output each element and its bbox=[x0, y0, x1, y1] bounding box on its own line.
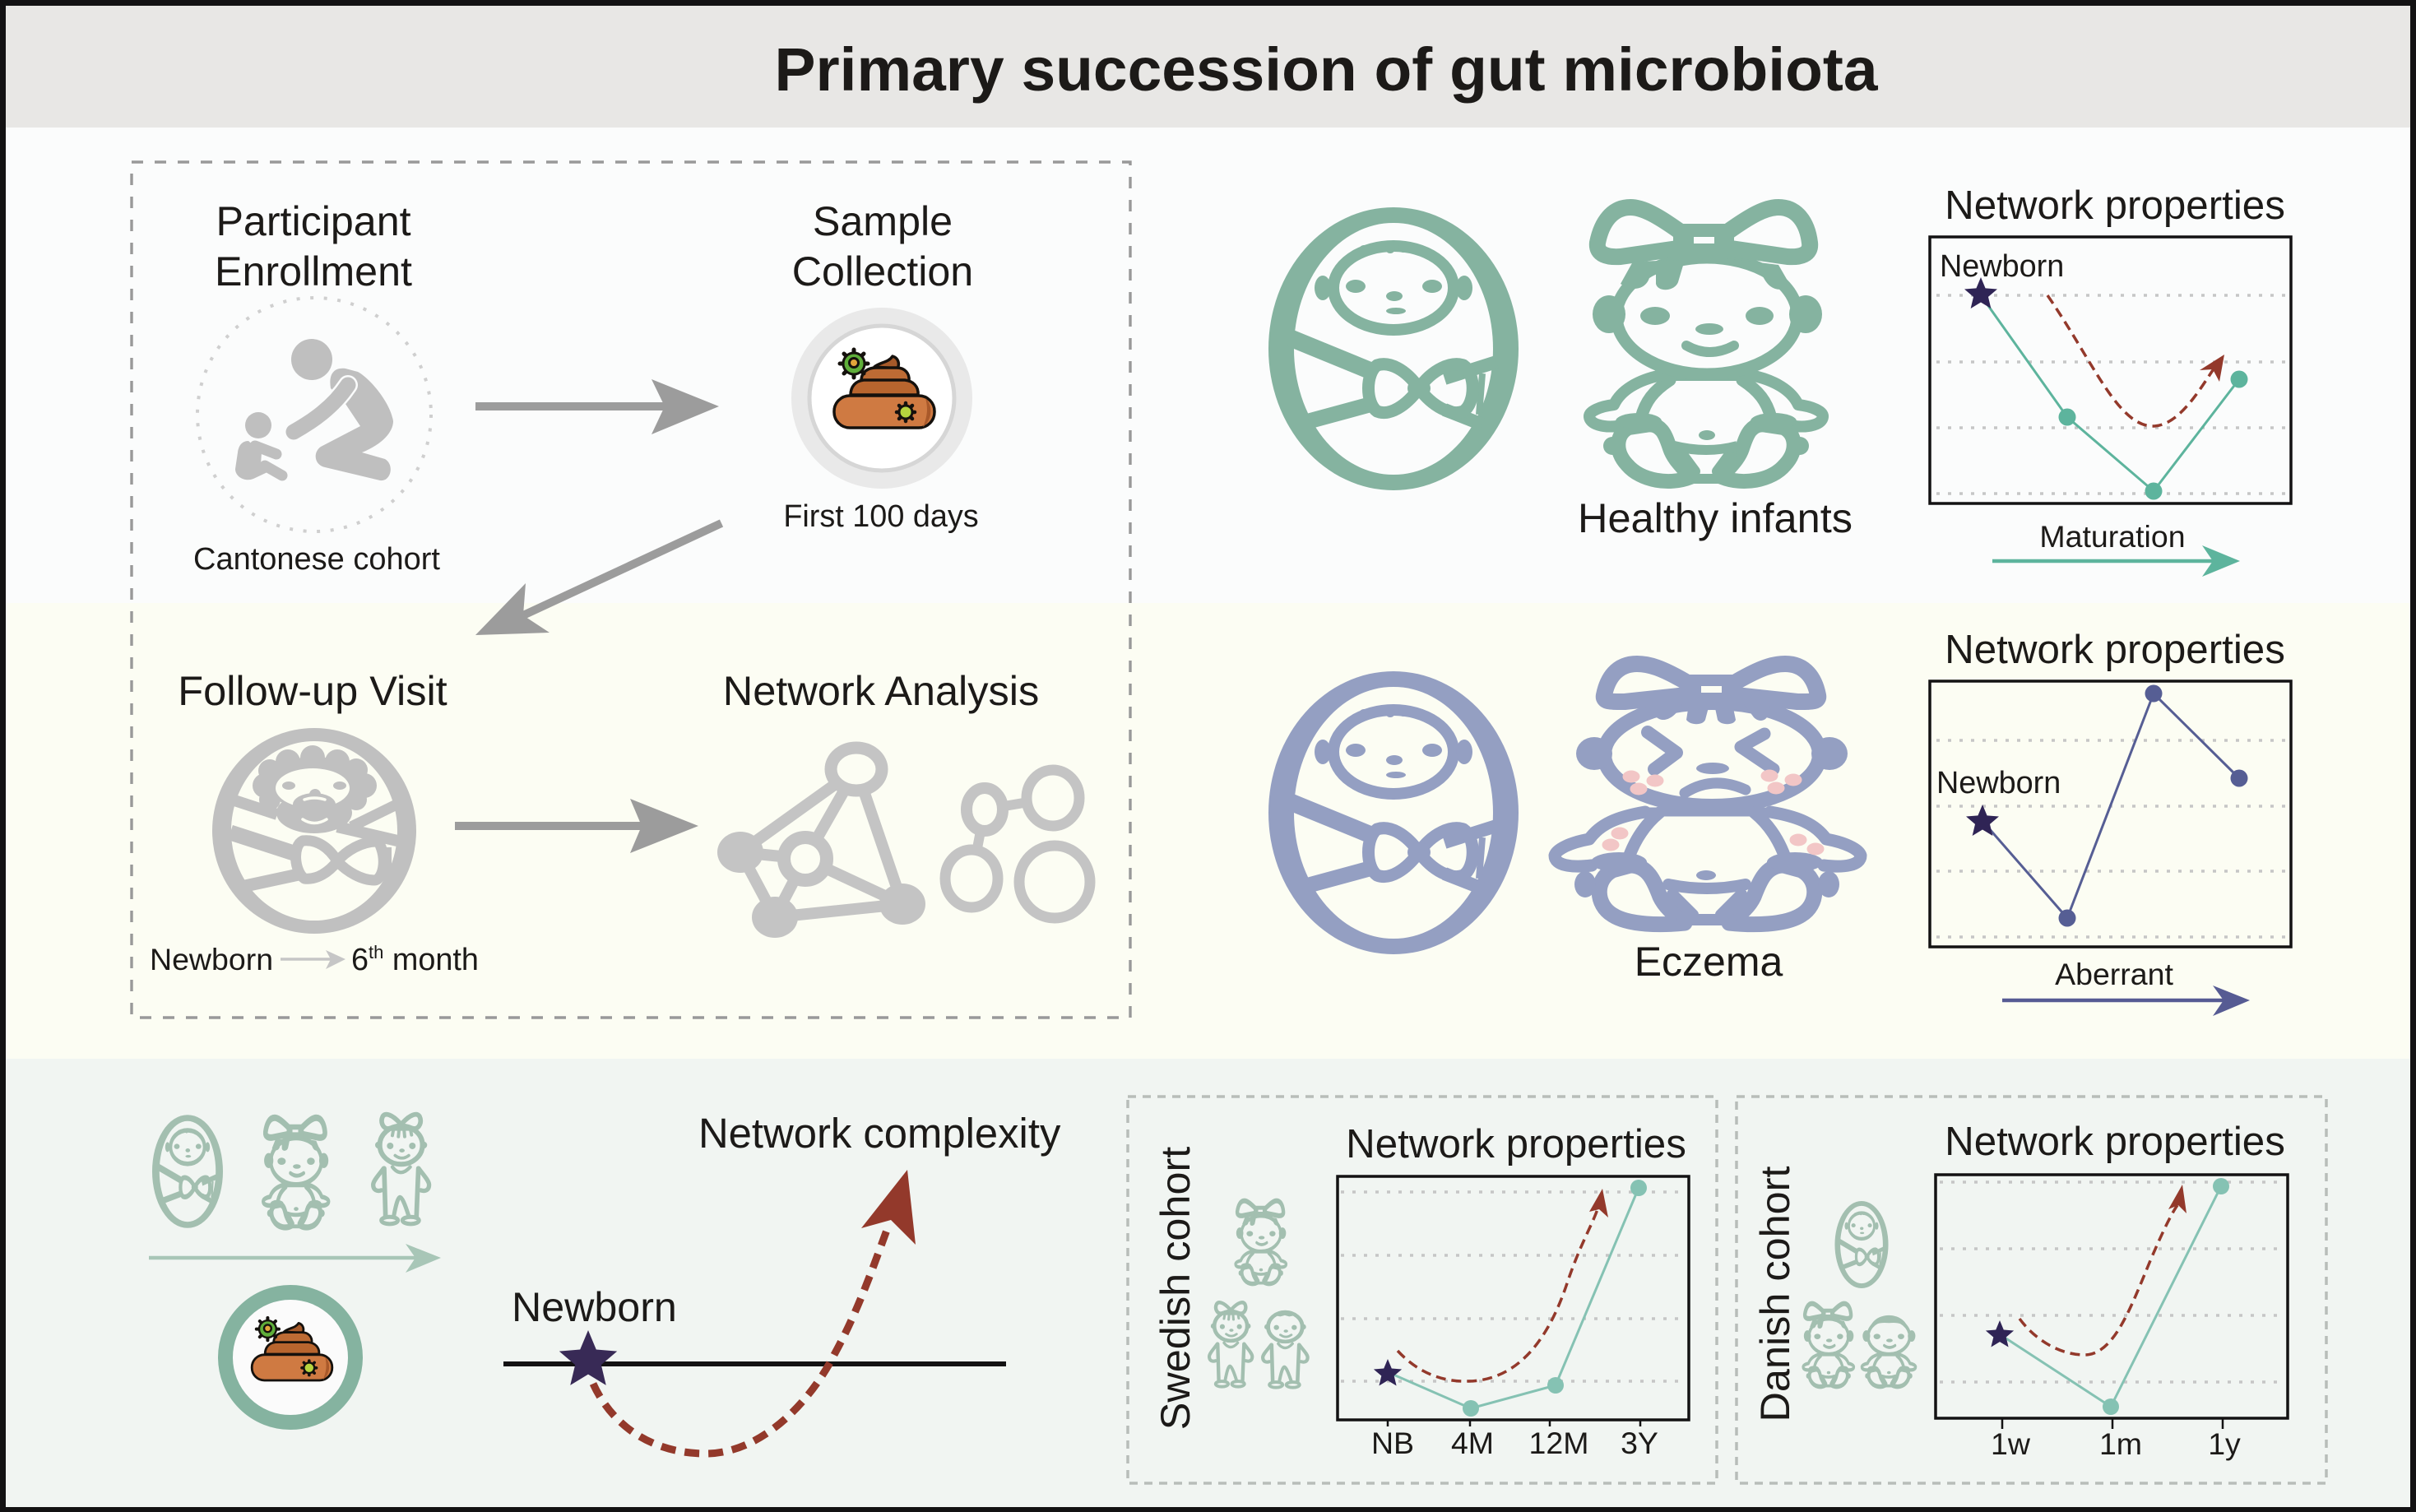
panel: danish cohort: 1w bbox=[1991, 1426, 2031, 1461]
label: newborn to sixth month bbox=[150, 942, 479, 977]
label: cantonese cohort: Cantonese cohort bbox=[193, 542, 440, 577]
icon: eczema swaddled infant bbox=[1268, 671, 1519, 954]
label: newborn: Newborn bbox=[512, 1284, 677, 1330]
icon: eczema crying baby bbox=[1555, 664, 1861, 925]
panel: swedish cohort: 4M bbox=[1451, 1426, 1494, 1460]
band: validation cohorts bbox=[6, 1059, 2410, 1507]
label: aberrant arrow bbox=[2002, 957, 2250, 1016]
band: healthy infants bbox=[6, 128, 2410, 603]
icon: swaddled infant with curly hair bbox=[212, 728, 416, 934]
chart: healthy network properties: Newborn bbox=[1940, 249, 2064, 284]
panel: swedish cohort: Network properties bbox=[1346, 1121, 1686, 1166]
label: healthy infants: Healthy infants bbox=[1578, 494, 1853, 541]
band: eczema bbox=[6, 603, 2410, 1059]
label: newborn to sixth month: th bbox=[369, 942, 383, 962]
heading: participant enrollment: Enrollment bbox=[215, 248, 412, 295]
panel: swedish cohort: 12M bbox=[1529, 1426, 1588, 1460]
panel: swedish cohort: 3Y bbox=[1621, 1426, 1658, 1460]
star: newborn bbox=[559, 1330, 617, 1385]
heading: participant enrollment: Participant bbox=[216, 198, 411, 244]
heading: sample collection: Collection bbox=[792, 248, 973, 295]
arrow: enrollment to sample collection bbox=[475, 379, 719, 434]
panel: danish cohort: Network properties bbox=[1945, 1119, 2285, 1164]
label: network complexity: Network complexity bbox=[698, 1110, 1061, 1157]
panel: swedish cohort: Swedish cohort bbox=[1152, 1147, 1199, 1430]
arrow: sample collection to follow-up bbox=[475, 523, 721, 635]
icon: network graphs bbox=[717, 748, 1090, 938]
heading: follow-up visit: Follow-up Visit bbox=[178, 667, 447, 714]
icon: stool with green ring bbox=[225, 1292, 355, 1422]
panel: study workflow bbox=[132, 162, 1130, 1018]
chart: eczema network properties bbox=[1930, 627, 2291, 947]
panel: danish cohort bbox=[1737, 1097, 2326, 1483]
label: newborn to sixth month: Newborn bbox=[150, 942, 273, 976]
heading: sample collection: Sample bbox=[813, 198, 953, 244]
heading: network analysis: Network Analysis bbox=[723, 667, 1039, 714]
label: eczema: Eczema bbox=[1635, 939, 1783, 985]
arrow: follow-up to network analysis bbox=[455, 799, 698, 853]
panel: swedish cohort: NB bbox=[1371, 1426, 1414, 1460]
header band bbox=[6, 6, 2410, 128]
icon: small toddler girl bbox=[373, 1115, 429, 1224]
label: newborn to sixth month: 6 bbox=[351, 943, 369, 977]
chart: eczema network properties: Newborn bbox=[1936, 766, 2061, 800]
panel: danish cohort: Danish cohort bbox=[1751, 1166, 1798, 1422]
label: maturation arrow bbox=[1992, 519, 2240, 577]
label: maturation arrow: Maturation bbox=[2039, 519, 2186, 554]
label: newborn to sixth month: month bbox=[383, 943, 479, 977]
arrow: age progression bbox=[149, 1244, 441, 1273]
label: first 100 days: First 100 days bbox=[783, 499, 979, 534]
icon: small swaddled infant bbox=[152, 1115, 223, 1228]
curve: network complexity trajectory bbox=[593, 1170, 916, 1454]
icon: adult and infant bbox=[197, 298, 431, 531]
chart: healthy network properties: Network properties bbox=[1945, 183, 2285, 228]
icon: small sitting girl bbox=[263, 1118, 328, 1227]
panel: danish cohort: 1m bbox=[2099, 1426, 2142, 1461]
chart: healthy network properties bbox=[1930, 183, 2291, 503]
baseline bbox=[503, 1361, 1006, 1366]
icon: healthy swaddled infant bbox=[1268, 207, 1519, 490]
panel: danish cohort: 1y bbox=[2208, 1426, 2241, 1461]
chart: eczema network properties: Network properties bbox=[1945, 627, 2285, 672]
label: aberrant arrow: Aberrant bbox=[2055, 957, 2173, 991]
icon: stool sample bbox=[791, 308, 972, 489]
icon: healthy baby girl bbox=[1589, 207, 1823, 481]
panel: swedish cohort bbox=[1128, 1097, 1717, 1483]
title: Primary succession of gut microbiota bbox=[775, 35, 1878, 104]
